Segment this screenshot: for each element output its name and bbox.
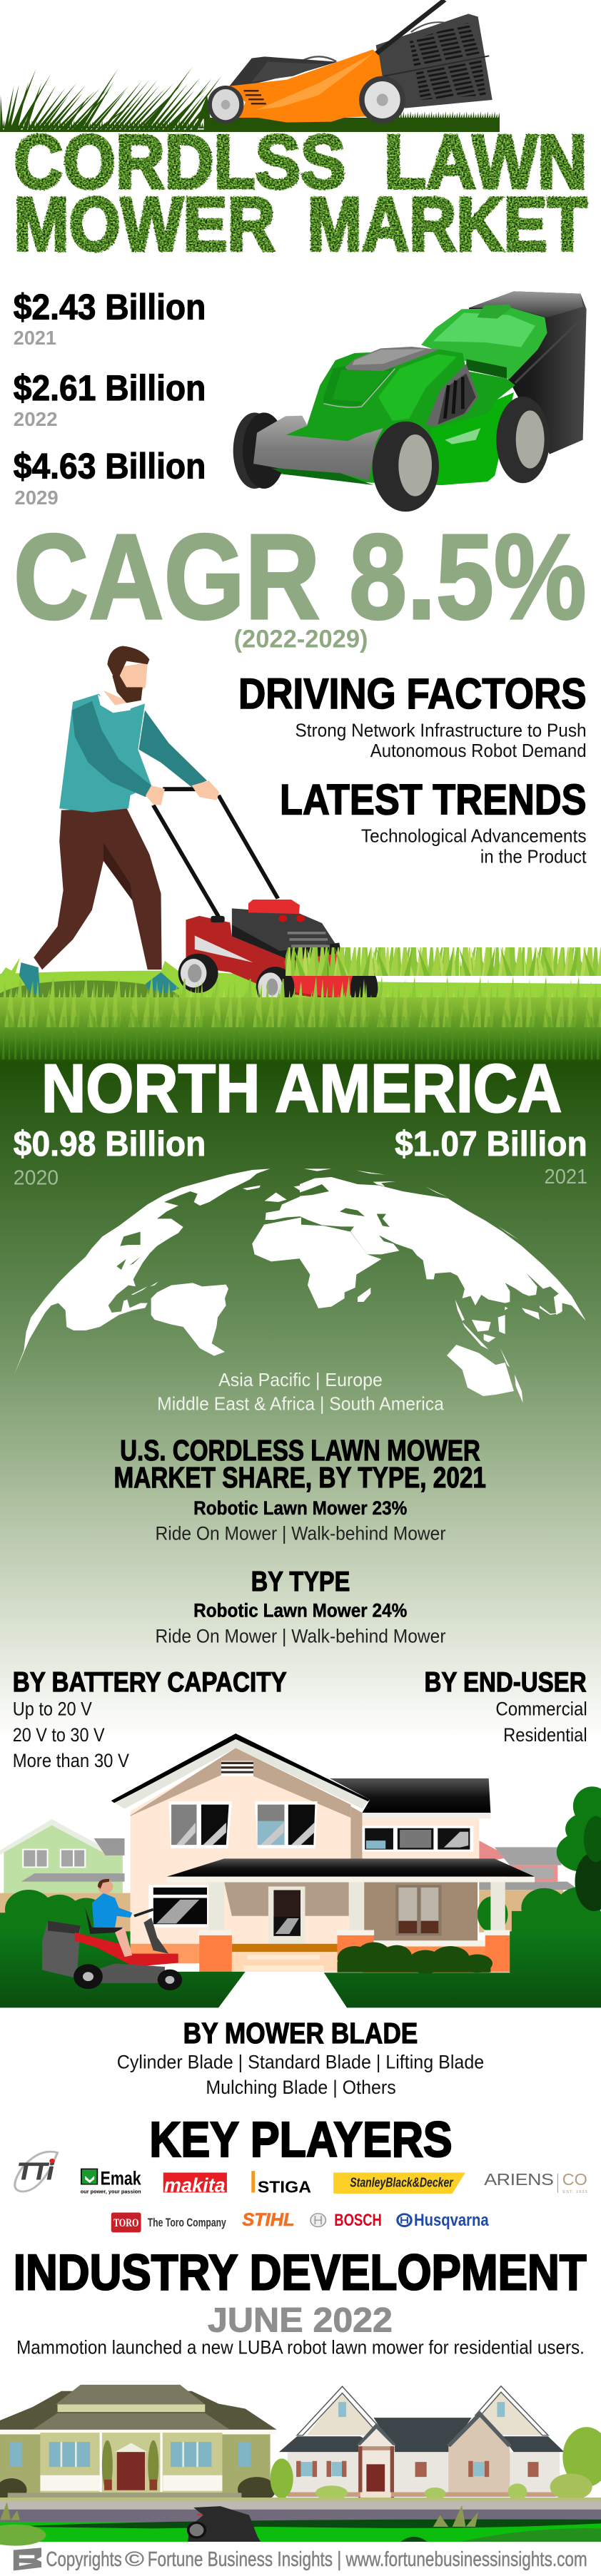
lawn tufts: [0, 957, 180, 975]
illustration: red mower: [178, 900, 378, 1011]
by battery capacity: [13, 1666, 287, 1771]
title and values: [14, 119, 587, 509]
market value 2021: [14, 287, 206, 350]
icon: orange mower: [208, 0, 493, 123]
map: Asia, Africa and Oceania: [300, 1169, 586, 1403]
segments and house: [0, 1566, 601, 2050]
foreground grass: [0, 947, 601, 1063]
value 2020: 2020: [14, 1166, 59, 1189]
logo: STIGA: [251, 2171, 311, 2196]
value 2021: 2021: [545, 1165, 587, 1188]
logo: Emak: [81, 2169, 141, 2194]
regions list: Asia Pacific | Europe: [218, 1370, 383, 1390]
mower blade list: [117, 2052, 484, 2099]
by mower blade heading: BY MOWER BLADE: [183, 2017, 418, 2050]
front bushes: [338, 1943, 493, 1974]
CAGR and drivers: [0, 509, 601, 1027]
market value 2021: $2.43 Billion: [14, 287, 206, 327]
tree right: [557, 1786, 601, 1911]
left house: [0, 2385, 277, 2503]
market value 2021: 2021: [14, 327, 56, 350]
by type: BY TYPE: [251, 1566, 350, 1597]
grass tufts: [0, 2502, 478, 2527]
icon: green mower: [233, 291, 587, 511]
logo: Husqvarna: [398, 2210, 489, 2230]
copyright text: Copyrights: [46, 2547, 122, 2571]
market value 2022: [14, 367, 206, 430]
main house: [111, 1734, 535, 1972]
mower blade list: Mulching Blade | Others: [206, 2077, 396, 2099]
lawn right: [324, 1931, 601, 2007]
fence right: [479, 1890, 563, 1933]
icon: robot mower: [188, 2506, 261, 2542]
tall grass: [0, 66, 221, 131]
bushes right rear: [478, 1887, 601, 1933]
mower blade list: Cylinder Blade | Standard Blade | Lifting Blade: [117, 2052, 484, 2073]
logo: Stanley Black & Decker: StanleyBlack&Decker: [350, 2176, 454, 2190]
U.S. market share: [113, 1435, 486, 1544]
logo: makita: makita: [164, 2174, 226, 2196]
footer logo: [14, 2547, 41, 2571]
logo: Ariens Co: CO: [562, 2171, 587, 2189]
logo: Toro: [111, 2212, 226, 2232]
grass blades right second layer: [286, 947, 601, 999]
bushes left: [0, 1890, 106, 1932]
title: CORDLSS: [14, 119, 345, 205]
blade, players, development: [0, 2052, 601, 2571]
logo: Toro: The Toro Company: [148, 2216, 226, 2229]
CAGR period: (2022-2029): [234, 626, 368, 653]
U.S. market share: Ride On Mower | Walk-behind Mower: [155, 1524, 446, 1544]
logo: Stanley Black & Decker: [333, 2173, 465, 2194]
by type: Ride On Mower | Walk-behind Mower: [155, 1626, 446, 1647]
key players heading: KEY PLAYERS: [149, 2112, 453, 2167]
lawn left: [0, 1931, 246, 2007]
front lawn: [0, 2520, 601, 2546]
by battery capacity: Up to 20 V: [13, 1699, 92, 1720]
grass blades left: [0, 979, 286, 1000]
fence: [0, 1893, 131, 1933]
logo: Bosch: [310, 2210, 382, 2230]
grass texture base: [0, 997, 601, 1063]
short grass left: [0, 120, 211, 128]
regions list: [157, 1370, 444, 1414]
logo: TTI: TTi: [17, 2157, 54, 2184]
by battery capacity: More than 30 V: [13, 1751, 130, 1771]
logo: Stihl: STIHL: [242, 2209, 294, 2230]
lawn ground: [0, 971, 601, 1027]
background gradient panel: [0, 1059, 601, 1741]
ground strip: [0, 118, 500, 132]
logo: Toro: TORO: [113, 2216, 138, 2229]
by battery capacity: BY BATTERY CAPACITY: [13, 1666, 287, 1698]
map: Americas and western Europe: [14, 1169, 301, 1375]
background houses: [0, 1819, 579, 1895]
illustration: man mowing: [19, 646, 278, 995]
market value 2029: [14, 445, 206, 509]
driving factors: [238, 670, 587, 761]
street scene: [0, 2385, 601, 2546]
market value 2022: 2022: [14, 408, 58, 430]
by battery capacity: 20 V to 30 V: [13, 1725, 105, 1746]
logo: Ariens Co: ARIENS: [484, 2171, 554, 2189]
logo: STIGA: STIGA: [258, 2178, 311, 2196]
regions list: Middle East & Africa | South America: [157, 1393, 444, 1414]
grass streaks: [0, 1017, 601, 1059]
market value 2022: $2.61 Billion: [14, 367, 206, 408]
grass highlights: [0, 982, 601, 1033]
title: [14, 119, 587, 267]
logo: Ariens Co: EST. 1933: [562, 2190, 587, 2194]
value 2021: [395, 1124, 587, 1188]
footer: [14, 2547, 587, 2571]
by end-user: [424, 1666, 587, 1746]
logo: Bosch: BOSCH: [334, 2210, 382, 2230]
short grass right: [395, 112, 500, 119]
market value 2029: $4.63 Billion: [14, 445, 206, 486]
latest trends: [280, 775, 587, 867]
value 2020: $0.98 Billion: [14, 1124, 206, 1164]
logo: TTI: [15, 2152, 58, 2191]
logo: Emak: Emak: [101, 2169, 141, 2189]
market value 2029: 2029: [14, 487, 59, 509]
road: [0, 2498, 601, 2523]
by type: Robotic Lawn Mower 24%: [193, 1601, 407, 1622]
trees and shrubs: [271, 2427, 601, 2500]
date: JUNE 2022: [208, 2301, 393, 2339]
logo: Husqvarna: Husqvarna: [414, 2210, 489, 2230]
logo: Ariens Co: [484, 2171, 587, 2194]
copyright text: ©: [125, 2547, 144, 2571]
lawn shadow: [0, 980, 180, 1017]
top hero: grass and orange mower: [0, 0, 500, 132]
world map: [14, 1169, 586, 1403]
logo: Emak: our power, your passion: [81, 2189, 141, 2194]
north america section: [14, 1051, 587, 1544]
value 2020: [14, 1124, 206, 1189]
man on riding mower: [42, 1879, 182, 1990]
grass blades right: [286, 947, 601, 999]
by type: [155, 1566, 446, 1647]
U.S. market share: Robotic Lawn Mower 23%: [193, 1498, 407, 1519]
title: MOWER: [14, 181, 276, 267]
right house: [279, 2386, 564, 2500]
